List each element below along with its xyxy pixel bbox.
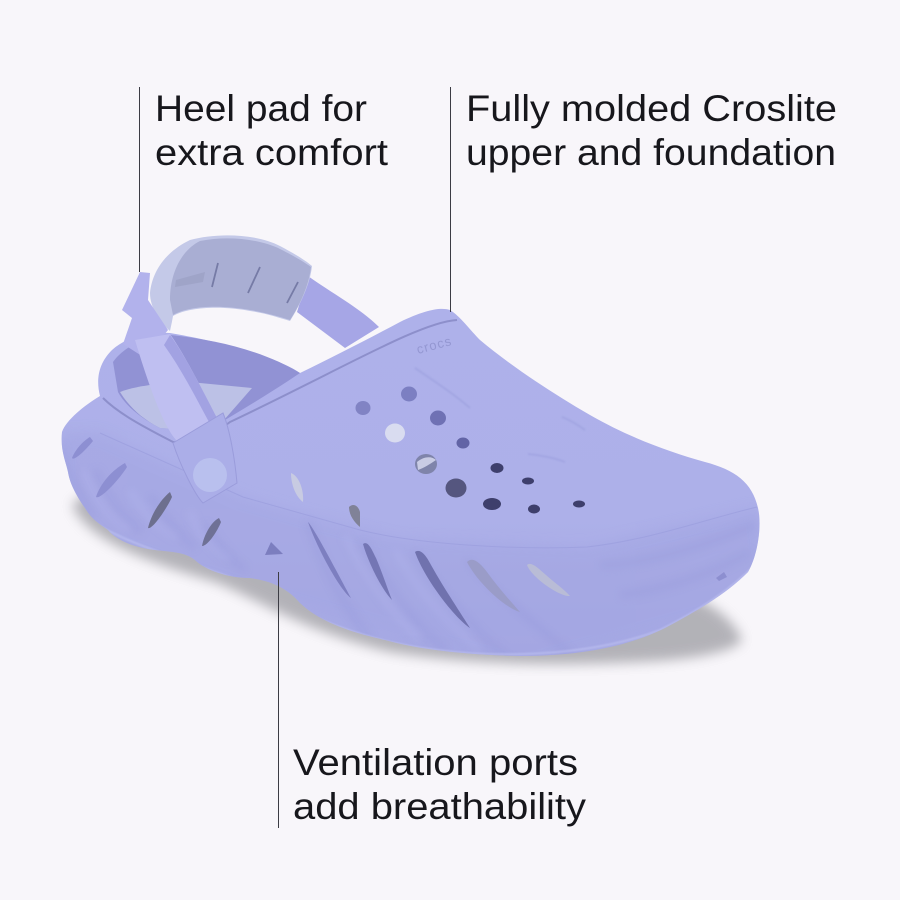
shoe illustration — [60, 235, 770, 670]
callout: ventilation ports: Ventilation ports — [293, 742, 578, 783]
collar seam line — [103, 320, 457, 443]
insole — [120, 383, 252, 429]
callout: heel pad: Heel pad for — [155, 88, 367, 129]
sole parting line — [100, 433, 757, 548]
heel pad — [150, 235, 312, 331]
rivet — [193, 458, 227, 492]
sole shading and lobes — [60, 368, 770, 670]
callout: heel pad — [140, 87, 389, 272]
callout: molded upper: upper and foundation — [466, 132, 836, 173]
rivet tab — [173, 413, 237, 503]
infographic canvas — [62, 87, 836, 828]
callout: heel pad: extra comfort — [155, 132, 389, 173]
rear strap, right side — [297, 276, 379, 348]
shoe ground shadow — [72, 490, 742, 664]
callout: ventilation ports: add breathability — [293, 786, 587, 827]
left buckle strap — [122, 272, 217, 442]
outsole slots — [72, 437, 727, 628]
callout: molded upper — [450, 87, 837, 312]
brand mark on upper: crocs — [415, 333, 454, 357]
callout: ventilation ports — [278, 572, 587, 828]
heel cup interior — [113, 335, 300, 429]
ventilation holes — [356, 386, 585, 514]
clog body — [62, 309, 760, 656]
callout: molded upper: Fully molded Croslite — [466, 88, 837, 129]
